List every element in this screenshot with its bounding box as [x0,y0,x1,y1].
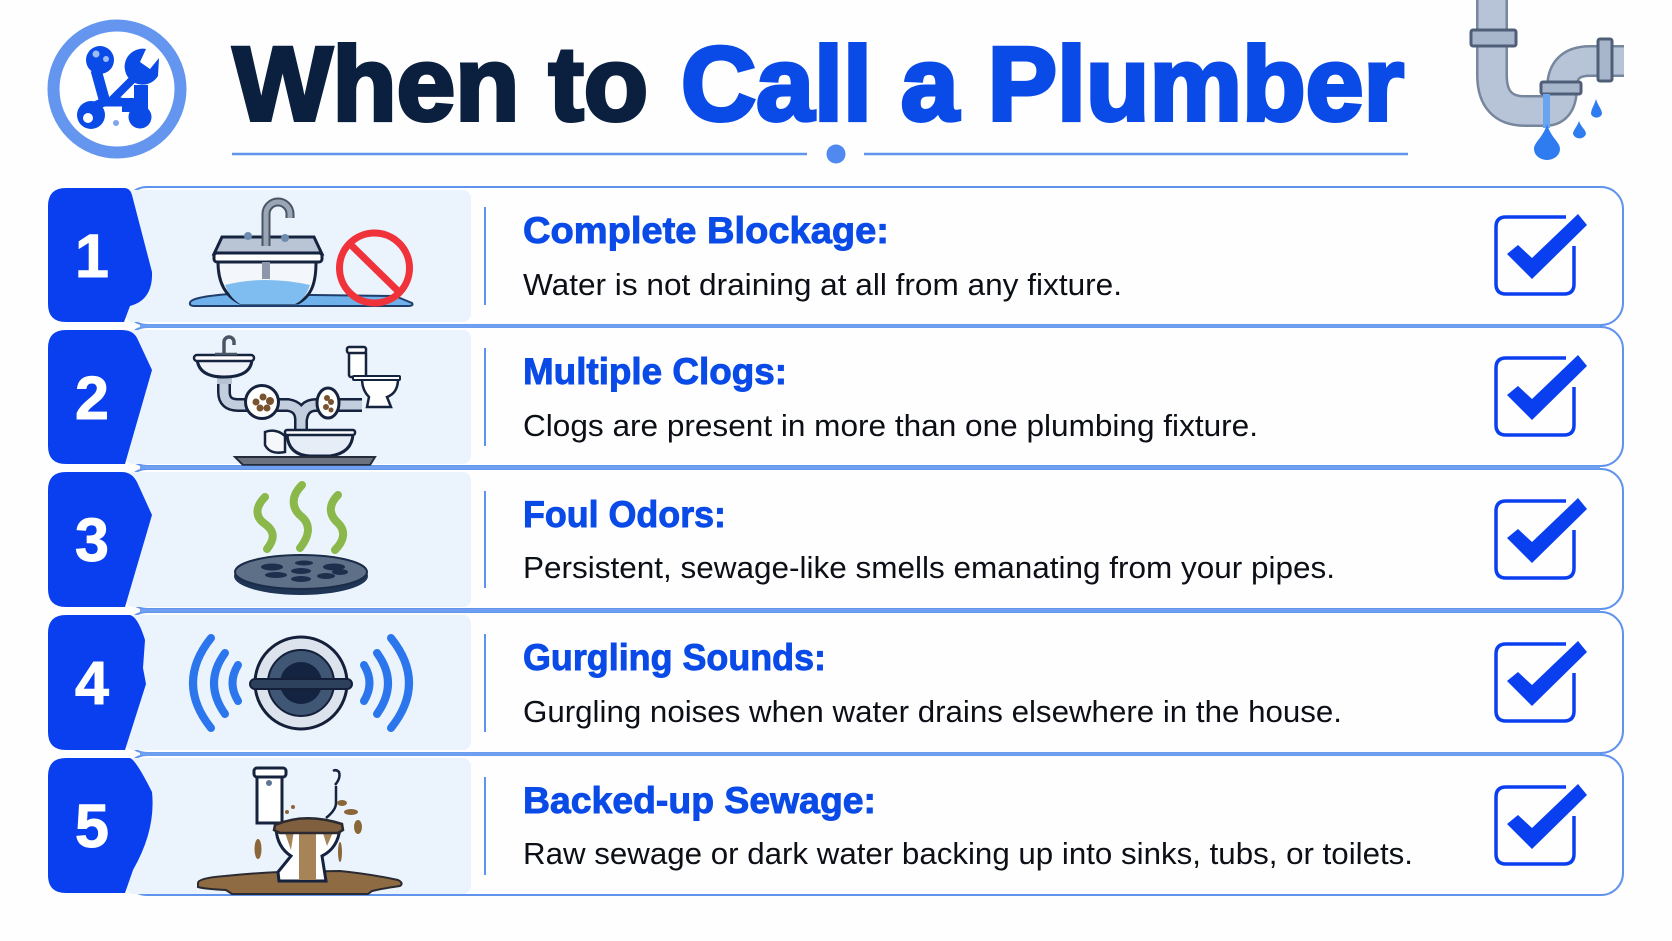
text: foul odors: Persistent, sewage-like smells emanating from your pipes. [523,550,1335,585]
text: multiple clogs: Multiple Clogs: [523,351,787,392]
title: When to [233,26,648,143]
panel: row 4 gurgling sounds [48,612,1623,753]
title [233,26,1404,143]
number badge 5: 5 [75,792,109,860]
icon: drain with sound waves [193,637,409,729]
text: multiple clogs [523,351,1258,443]
number badge 3: 3 [75,506,109,574]
icon: checkbox [1496,784,1587,864]
text: backed-up sewage: Raw sewage or dark water backing up into sinks, tubs, or toilets. [523,836,1413,871]
text: complete blockage: Water is not draining at all from any fixture. [523,267,1122,302]
text: multiple clogs: Clogs are present in more than one plumbing fixture. [523,408,1258,443]
icon: checkbox [1496,641,1587,721]
panel: row 3 foul odors [48,469,1623,609]
number badge 4 [48,615,146,750]
text: foul odors [523,494,1335,585]
text: complete blockage: Complete Blockage: [523,210,889,251]
logo: crossed wrenches badge [54,26,180,152]
icon: clogged pipes network [194,337,400,465]
text: gurgling sounds: Gurgling Sounds: [523,637,826,678]
panel: row 2 multiple clogs [48,327,1623,466]
panel: row 5 backed-up sewage [48,755,1623,895]
title: Call a Plumber [681,26,1404,143]
text: backed-up sewage [523,780,1413,871]
text: complete blockage [523,210,1122,302]
text: gurgling sounds [523,637,1342,729]
text: backed-up sewage: Backed-up Sewage: [523,780,876,821]
icon: overflowing toilet with sewage [198,768,402,894]
panel: row 1 complete blockage [48,187,1623,325]
number badge 1: 1 [75,222,109,290]
text: foul odors: Foul Odors: [523,494,726,535]
number badge 1 [48,188,152,322]
icon: checkbox [1496,498,1587,578]
icon: leaking pipe [1471,0,1624,160]
number badge 2: 2 [75,364,109,432]
number badge 2 [48,330,152,464]
icon: blocked sink with no sign [190,202,412,306]
number badge 3 [48,472,152,607]
icon: checkbox [1496,355,1587,435]
title underline with dot [232,144,1408,164]
icon: drain with green odor waves [234,485,368,595]
number badge 4: 4 [75,649,109,717]
icon: checkbox [1496,214,1587,294]
number badge 5 [48,758,153,893]
text: gurgling sounds: Gurgling noises when water drains elsewhere in the house. [523,694,1342,729]
